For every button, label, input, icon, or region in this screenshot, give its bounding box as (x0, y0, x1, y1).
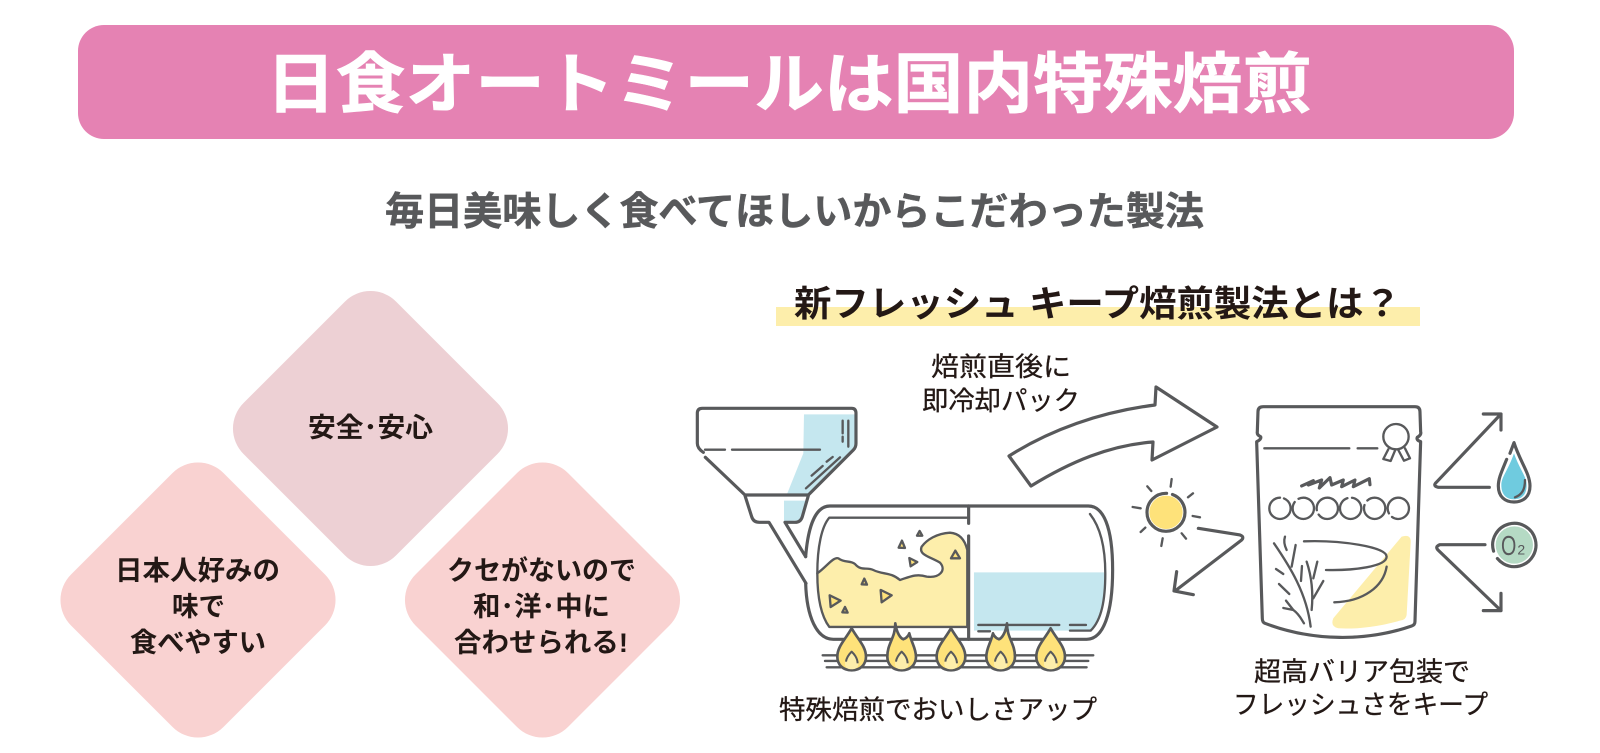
icon: roasting machine (697, 408, 1113, 670)
diamond: versatile: 和･洋･中に (473, 592, 610, 622)
rosette badge (1383, 424, 1410, 461)
diamond: versatile: クセがないので (447, 555, 636, 586)
arrow: oxygen deflected (1437, 545, 1501, 611)
arrow: light deflected (1174, 528, 1243, 595)
scribbled brand mark (1302, 478, 1370, 488)
caption: roasting: 特殊焙煎でおいしさアップ (779, 695, 1097, 725)
diamond: japanese taste: 食べやすい (130, 628, 266, 658)
icon: moisture and oxygen blocked (1435, 414, 1544, 611)
caption: cool and pack right after roasting (922, 352, 1080, 416)
icon: barrier pouch (1257, 407, 1421, 637)
hopper (697, 408, 856, 583)
icon: water drop (1498, 443, 1530, 502)
subtitle: 毎日美味しく食べてほしいからこだわった製法 (385, 191, 1204, 234)
title banner (78, 25, 1514, 139)
section heading with highlight: 新フレッシュ キープ焙煎製法とは？ (794, 283, 1401, 324)
caption: barrier packaging: 超高バリア包装で (1254, 657, 1470, 687)
row of circles (1269, 498, 1409, 519)
diamond: versatile: 合わせられる! (454, 628, 628, 658)
diamond: versatile (390, 448, 695, 752)
caption: barrier packaging: フレッシュさをキープ (1233, 690, 1488, 720)
panel: three benefit diamonds (46, 276, 695, 752)
bowl and wheat illustration (1274, 537, 1387, 627)
arrow: moisture deflected (1435, 414, 1501, 487)
caption: cool and pack right after roasting: 即冷却パック (922, 386, 1080, 416)
drum outline (806, 506, 1113, 639)
icon: sun with blocked light (1133, 479, 1243, 595)
caption: cool and pack right after roasting: 焙煎直後に (931, 352, 1071, 382)
diamond: safety: 安全･安心 (308, 413, 433, 443)
cooling chamber water (974, 572, 1105, 631)
arrow: roaster to package (1009, 387, 1217, 486)
diamond: safety (218, 276, 523, 581)
diamond: japanese taste (46, 448, 350, 752)
diamond: japanese taste: 味で (172, 592, 225, 622)
title text: 日食オートミールは国内特殊焙煎 (266, 47, 1312, 121)
icon: oxygen O2: O (1501, 530, 1516, 561)
icon: oxygen O2 (1485, 515, 1544, 575)
icon: oxygen O2: 2 (1517, 542, 1525, 558)
roasting drum contents: oats (817, 533, 967, 627)
diamond: japanese taste: 日本人好みの (115, 556, 280, 586)
caption: barrier packaging (1233, 657, 1488, 720)
flames (837, 623, 1065, 670)
burner lines (823, 655, 1093, 667)
oat flakes (830, 531, 960, 613)
